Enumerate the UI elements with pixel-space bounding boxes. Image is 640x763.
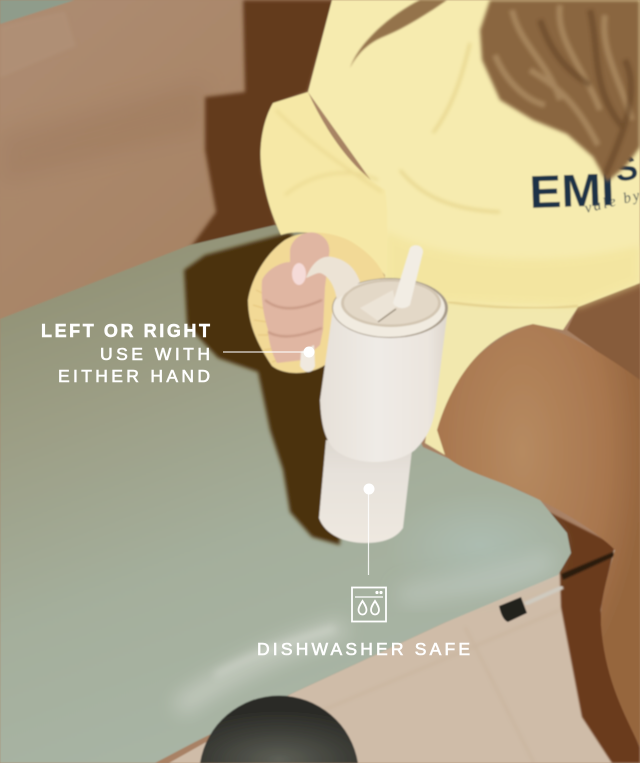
lower floor with tiles xyxy=(169,510,640,763)
body text: EITHER HAND xyxy=(58,366,210,386)
exercise ball xyxy=(200,696,358,763)
callout: left or right xyxy=(41,321,314,386)
label: DISHWASHER SAFE xyxy=(257,639,470,659)
sweater body xyxy=(308,0,640,308)
leader line xyxy=(368,494,370,575)
light strands xyxy=(495,5,632,145)
leg xyxy=(437,283,640,747)
tumbler lower section xyxy=(319,440,412,543)
sweater lettering: S xyxy=(612,149,640,190)
sleeve cuff xyxy=(248,233,385,373)
cuff rib texture xyxy=(253,290,284,362)
body text xyxy=(58,344,210,386)
sleeve folds xyxy=(276,110,382,195)
leader line xyxy=(223,351,305,353)
sweater lettering: EMI xyxy=(529,163,615,218)
finger creases xyxy=(265,300,322,336)
front strand xyxy=(350,0,447,68)
handle foot xyxy=(300,345,315,372)
tumbler lid xyxy=(332,278,448,338)
sweater lettering: vale by xyxy=(583,188,640,217)
hand xyxy=(262,232,329,363)
tumbler upper section xyxy=(320,308,448,462)
handle xyxy=(306,257,360,300)
fingernail xyxy=(292,263,306,285)
hem line xyxy=(448,302,578,308)
hand and handle xyxy=(262,232,360,372)
tumbler xyxy=(319,245,448,543)
callout: dishwasher safe xyxy=(257,484,470,659)
body creases xyxy=(400,43,500,212)
dark strands xyxy=(540,10,631,175)
sleeve xyxy=(260,92,387,275)
cushion soft light xyxy=(385,490,575,600)
main hair mass xyxy=(480,0,640,182)
sweater lettering xyxy=(529,149,640,218)
shadow cast on the bench xyxy=(184,232,340,545)
cushion highlight xyxy=(178,628,345,708)
sweater xyxy=(260,0,640,308)
body text: USE WITH xyxy=(100,344,210,364)
shorts xyxy=(425,300,578,455)
icon: dishwasher xyxy=(352,588,386,622)
marker dot xyxy=(364,484,374,494)
heading: LEFT OR RIGHT xyxy=(41,321,210,341)
hair xyxy=(350,0,640,182)
marker dot xyxy=(304,346,314,358)
straw xyxy=(360,245,423,322)
bench metal leg xyxy=(499,552,615,622)
bench cushion xyxy=(0,225,575,763)
wall shadow behind the person xyxy=(180,0,335,262)
